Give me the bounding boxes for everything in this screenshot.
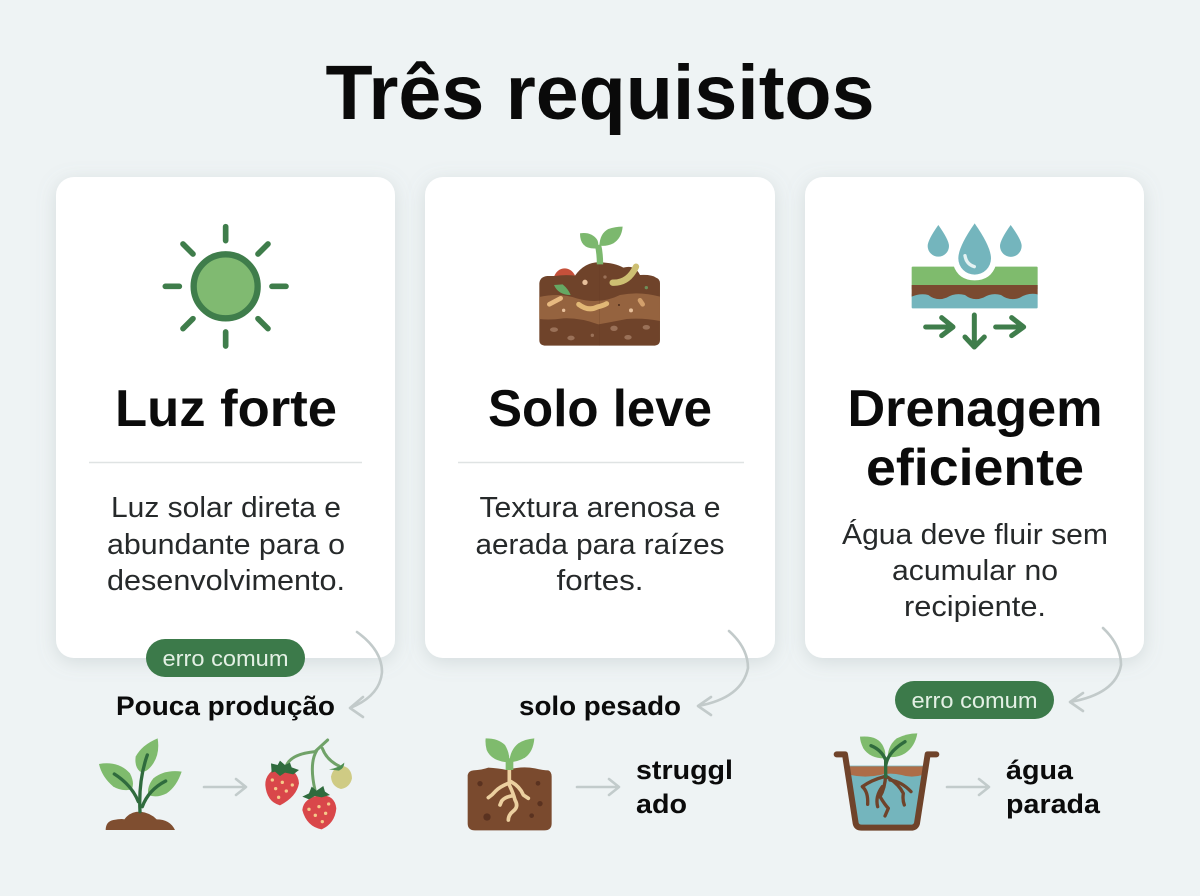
text: drenagem description: Água deve fluir sem: [842, 518, 1108, 551]
text: solo leve description: fortes.: [556, 565, 644, 597]
text: luz forte description: Luz solar direta e: [111, 492, 341, 524]
icon: drainage: [912, 223, 1038, 347]
icon: sun: [165, 227, 286, 346]
icon: strawberries: [265, 740, 352, 829]
arrow: soil to result: [577, 779, 619, 795]
label: pouca produção: Pouca produção: [116, 691, 335, 721]
badge: erro comum 3: [895, 681, 1054, 719]
text: luz forte description: [107, 492, 345, 597]
icon: waterlogged pot: [837, 733, 936, 828]
heading: drenagem eficiente: Drenagem: [848, 380, 1102, 438]
arrow: curved 2: [698, 631, 748, 715]
text: drenagem description: recipiente.: [904, 591, 1046, 623]
badge: erro comum 1: erro comum: [162, 646, 288, 671]
text: solo leve description: [476, 492, 724, 597]
arrow: plant to fruit: [204, 779, 246, 795]
arrow: curved 1: [350, 632, 382, 717]
panel: solo leve: [425, 177, 775, 658]
arrow: pot to result: [947, 779, 989, 795]
title: Três requisitos: [326, 50, 875, 136]
badge: erro comum 1: [146, 639, 305, 677]
text: solo leve description: aerada para raízes: [476, 529, 724, 561]
heading: drenagem eficiente: eficiente: [866, 439, 1084, 497]
panel: luz forte: [56, 177, 395, 658]
icon: seedling: [99, 738, 182, 830]
badge: erro comum 3: erro comum: [912, 688, 1038, 713]
label: água parada: [1006, 755, 1101, 819]
label: água parada: parada: [1006, 789, 1101, 819]
icon: heavy soil roots: [468, 738, 552, 830]
text: luz forte description: abundante para o: [107, 529, 345, 561]
text: solo leve description: Textura arenosa e: [480, 492, 720, 524]
heading: luz forte: Luz forte: [115, 380, 337, 438]
label: solo pesado: solo pesado: [519, 691, 681, 721]
heading: solo leve: Solo leve: [488, 380, 712, 438]
text: drenagem description: [842, 518, 1108, 623]
heading: drenagem eficiente: [848, 380, 1102, 497]
label: struggl ado: [636, 755, 733, 819]
label: struggl ado: struggl: [636, 755, 733, 785]
label: struggl ado: ado: [636, 789, 687, 819]
text: drenagem description: acumular no: [892, 555, 1058, 587]
label: água parada: água: [1006, 755, 1074, 785]
text: luz forte description: desenvolvimento.: [107, 565, 345, 597]
icon: soil: [539, 227, 660, 346]
arrow: curved 3: [1070, 628, 1121, 711]
panel: drenagem eficiente: [805, 177, 1144, 658]
